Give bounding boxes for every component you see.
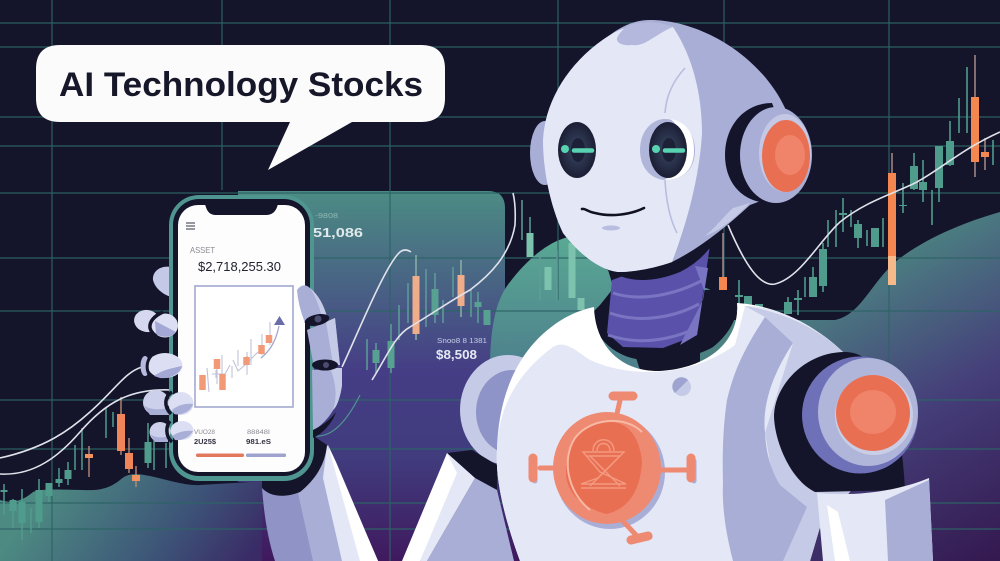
robot left shoulder and arm	[402, 355, 556, 561]
speech bubble with title	[36, 45, 445, 170]
robot neck	[593, 245, 737, 360]
phone frame	[169, 195, 314, 481]
joint 1	[304, 312, 330, 328]
left eye	[558, 122, 596, 178]
candlestick chart: left	[4, 397, 166, 540]
chest badge	[533, 396, 694, 541]
candlestick chart: right	[723, 55, 993, 315]
headphone	[725, 103, 812, 203]
panel text: upper value	[313, 211, 363, 240]
chin shadow	[597, 225, 712, 280]
right eye	[640, 119, 695, 180]
robot right shoulder joint	[774, 352, 918, 492]
bubble shape	[36, 45, 445, 170]
face plate	[543, 24, 702, 272]
phone bezel	[173, 199, 310, 476]
title: AI Technology Stocks	[59, 66, 423, 104]
skull	[543, 20, 790, 272]
notch	[205, 204, 278, 215]
menu icon	[186, 223, 195, 229]
panel: lower left hill	[0, 474, 285, 561]
trend lines	[0, 132, 1000, 474]
candlestick chart: centre	[367, 200, 581, 373]
thumb tip	[297, 285, 327, 323]
cheek plate	[705, 203, 750, 236]
progress bars	[196, 454, 244, 457]
finger 1 behind phone	[153, 267, 171, 297]
joint 2	[312, 360, 338, 370]
stat labels	[194, 429, 271, 446]
panel text: upper value: -9808	[315, 211, 338, 220]
stat labels: 88848I	[247, 429, 270, 436]
stat labels: 981.eS	[246, 437, 271, 446]
asset label: ASSET	[190, 245, 215, 255]
panel: neck-side hill	[700, 287, 722, 300]
head notch	[617, 22, 673, 45]
mini chart	[195, 286, 293, 407]
stat labels: 2U25$	[194, 437, 217, 446]
chest dot	[672, 377, 691, 396]
robot fingers	[132, 308, 194, 442]
asset value: $2,718,255.30	[198, 259, 281, 274]
panel text: lower value	[436, 336, 487, 362]
phone	[169, 195, 314, 481]
stat labels: VUO28	[194, 429, 215, 436]
finger 3	[140, 353, 182, 378]
face seam	[665, 68, 685, 233]
finger 4	[143, 390, 194, 415]
finger 5	[150, 421, 194, 442]
panel text: upper value: 51,086	[313, 225, 363, 240]
mouth	[582, 208, 644, 215]
phone screen	[178, 205, 305, 472]
robot right upper arm	[817, 478, 933, 561]
middle wrist segment	[307, 318, 340, 365]
panel: centre hill	[490, 236, 640, 370]
robot wrist and thumb	[297, 285, 342, 438]
lower wrist segment	[312, 368, 342, 430]
robot forearm	[262, 435, 378, 561]
panel: central chart card	[238, 191, 540, 561]
panel text: lower value: $8,508	[436, 348, 477, 362]
panel text: lower value: Snoo8 8 1381	[437, 336, 487, 345]
chin highlight	[602, 226, 620, 230]
finger 2	[132, 308, 178, 338]
panel: right hill	[700, 212, 1000, 561]
left ear	[530, 121, 560, 185]
robot torso	[497, 303, 860, 561]
robot head	[530, 20, 790, 280]
